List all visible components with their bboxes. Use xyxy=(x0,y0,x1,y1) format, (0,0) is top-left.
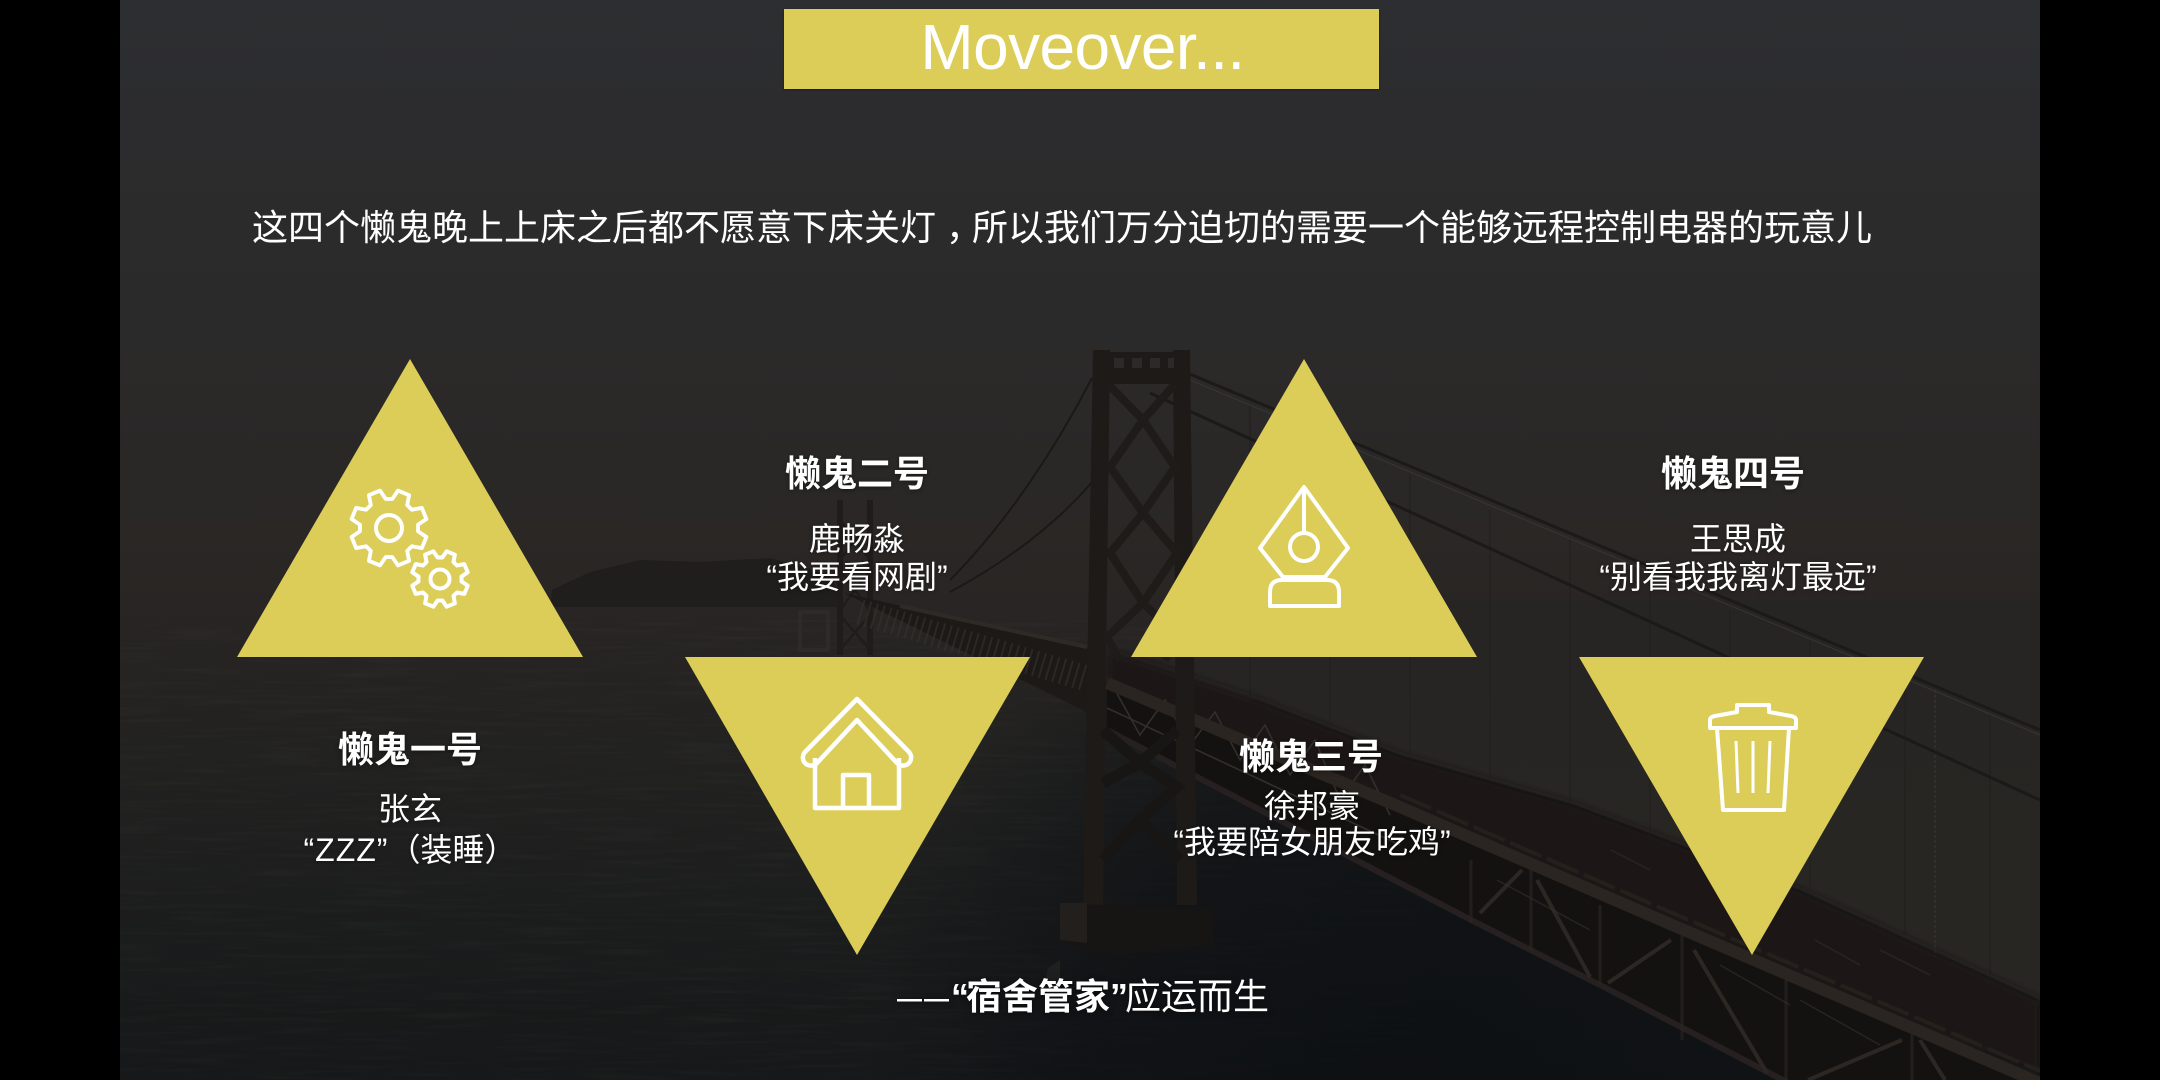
deep water shade xyxy=(860,700,2040,1080)
far bridge tower xyxy=(800,500,870,655)
heading: lazy two: 懒鬼二号 xyxy=(785,453,929,494)
icon: gears xyxy=(352,491,468,607)
closing line: ——“宿舍管家”应运而生 xyxy=(897,976,1269,1017)
icon: pen nib xyxy=(1260,487,1348,606)
road lane lines xyxy=(1497,850,1930,1045)
icon: house xyxy=(803,699,911,808)
text: lazy three name and quote: 徐邦豪 xyxy=(1264,788,1360,824)
main cables right xyxy=(1150,372,2040,800)
heading: lazy four: 懒鬼四号 xyxy=(1661,453,1805,494)
text: lazy two name and quote: “我要看网剧” xyxy=(766,559,948,595)
panel: triangle three with pen nib icon xyxy=(1131,359,1477,657)
panel: triangle four with trash icon xyxy=(1579,657,1924,955)
distant hill xyxy=(550,558,845,607)
lower chord xyxy=(1107,730,1802,1080)
text: lazy four name and quote: 王思成 xyxy=(1690,521,1786,557)
left cables xyxy=(950,378,1092,592)
tower cross bracing xyxy=(1103,384,1180,860)
panel: triangle two with house icon xyxy=(685,657,1030,955)
text: lazy two name and quote xyxy=(766,521,948,595)
truss interior xyxy=(1107,683,2040,1080)
title banner: Moveover... xyxy=(920,11,1245,83)
hanger cables xyxy=(1250,405,1990,1030)
upper chord xyxy=(1107,683,2040,1080)
text: lazy three name and quote: “我要陪女朋友吃鸡” xyxy=(1173,824,1451,860)
main bridge tower xyxy=(1043,350,1213,990)
subtitle text: 这四个懒鬼晚上上床之后都不愿意下床关灯 ，所以我们万分迫切的需要一个能够远程控制电器的玩意儿 xyxy=(252,207,1872,248)
truss posts and diagonals xyxy=(1471,860,1945,1080)
small truss bracing xyxy=(1107,690,1400,845)
text: lazy four name and quote: “别看我我离灯最远” xyxy=(1599,559,1877,595)
far water above the deck xyxy=(1190,600,2040,1000)
panel: triangle one with gears icon xyxy=(237,359,583,657)
text: lazy three name and quote xyxy=(1173,788,1451,860)
text: lazy one name and quote xyxy=(304,791,516,871)
text: lazy one name and quote: 张玄 xyxy=(378,791,442,827)
water ripples xyxy=(120,620,1420,1080)
icon: trash can xyxy=(1710,705,1796,810)
text: lazy one name and quote: “ZZZ”（装睡） xyxy=(304,825,516,871)
text: lazy four name and quote xyxy=(1599,521,1877,595)
tower pier xyxy=(1060,903,1213,955)
text: lazy two name and quote: 鹿畅淼 xyxy=(809,521,905,557)
title banner xyxy=(784,9,1379,89)
heading: lazy three: 懒鬼三号 xyxy=(1239,736,1383,777)
bridge deck xyxy=(844,593,2040,1080)
road surface band xyxy=(1107,650,2040,1073)
far truss span xyxy=(844,593,1107,730)
heading: lazy one: 懒鬼一号 xyxy=(338,729,482,770)
